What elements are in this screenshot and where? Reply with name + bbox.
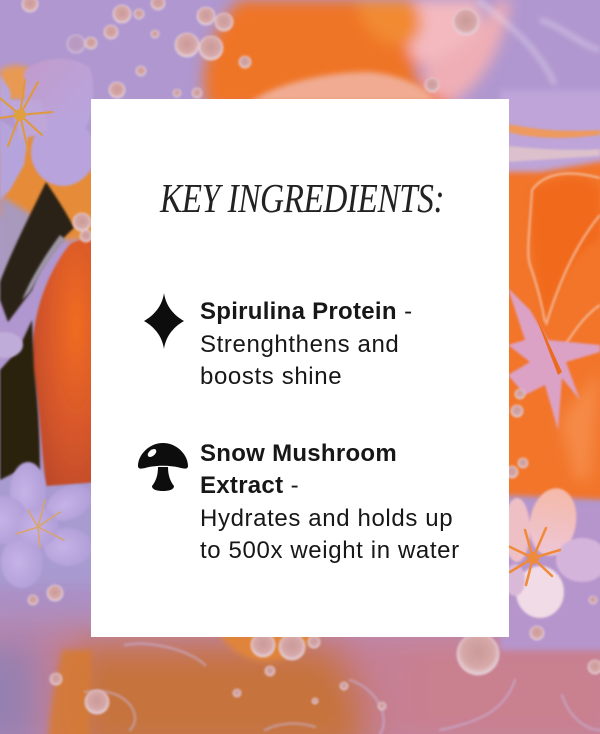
text: spirulina protein: Spirulina Protein - [200, 298, 413, 325]
text: spirulina protein: Strenghthens and [200, 331, 399, 358]
heading: KEY INGREDIENTS: [160, 175, 444, 221]
flower: bottom right [504, 485, 600, 618]
text: snow mushroom extract: Extract - [200, 472, 299, 499]
right orange fruit segments [500, 90, 600, 500]
text: snow mushroom extract [200, 440, 460, 564]
icon: mushroom [138, 443, 188, 491]
left column [0, 65, 100, 645]
text: snow mushroom extract: Snow Mushroom [200, 440, 397, 467]
panel: key ingredients card [91, 99, 509, 637]
flower stamens [0, 80, 560, 585]
text: spirulina protein [200, 298, 413, 390]
top orange area [204, 0, 510, 110]
leaf and fruit on left [32, 239, 100, 486]
lilac star in fruit [508, 288, 600, 430]
text: snow mushroom extract: Hydrates and holds up [200, 505, 453, 532]
bubble foam at top [250, 72, 435, 102]
flower: left small petal [0, 332, 23, 358]
text: spirulina protein: boosts shine [200, 363, 342, 390]
flower: bottom left [0, 462, 98, 588]
bottom water [0, 625, 600, 734]
right lower area [500, 505, 600, 650]
flower: top left [0, 59, 95, 200]
text: snow mushroom extract: to 500x weight in water [200, 537, 460, 564]
icon: four-point sparkle [144, 293, 184, 349]
